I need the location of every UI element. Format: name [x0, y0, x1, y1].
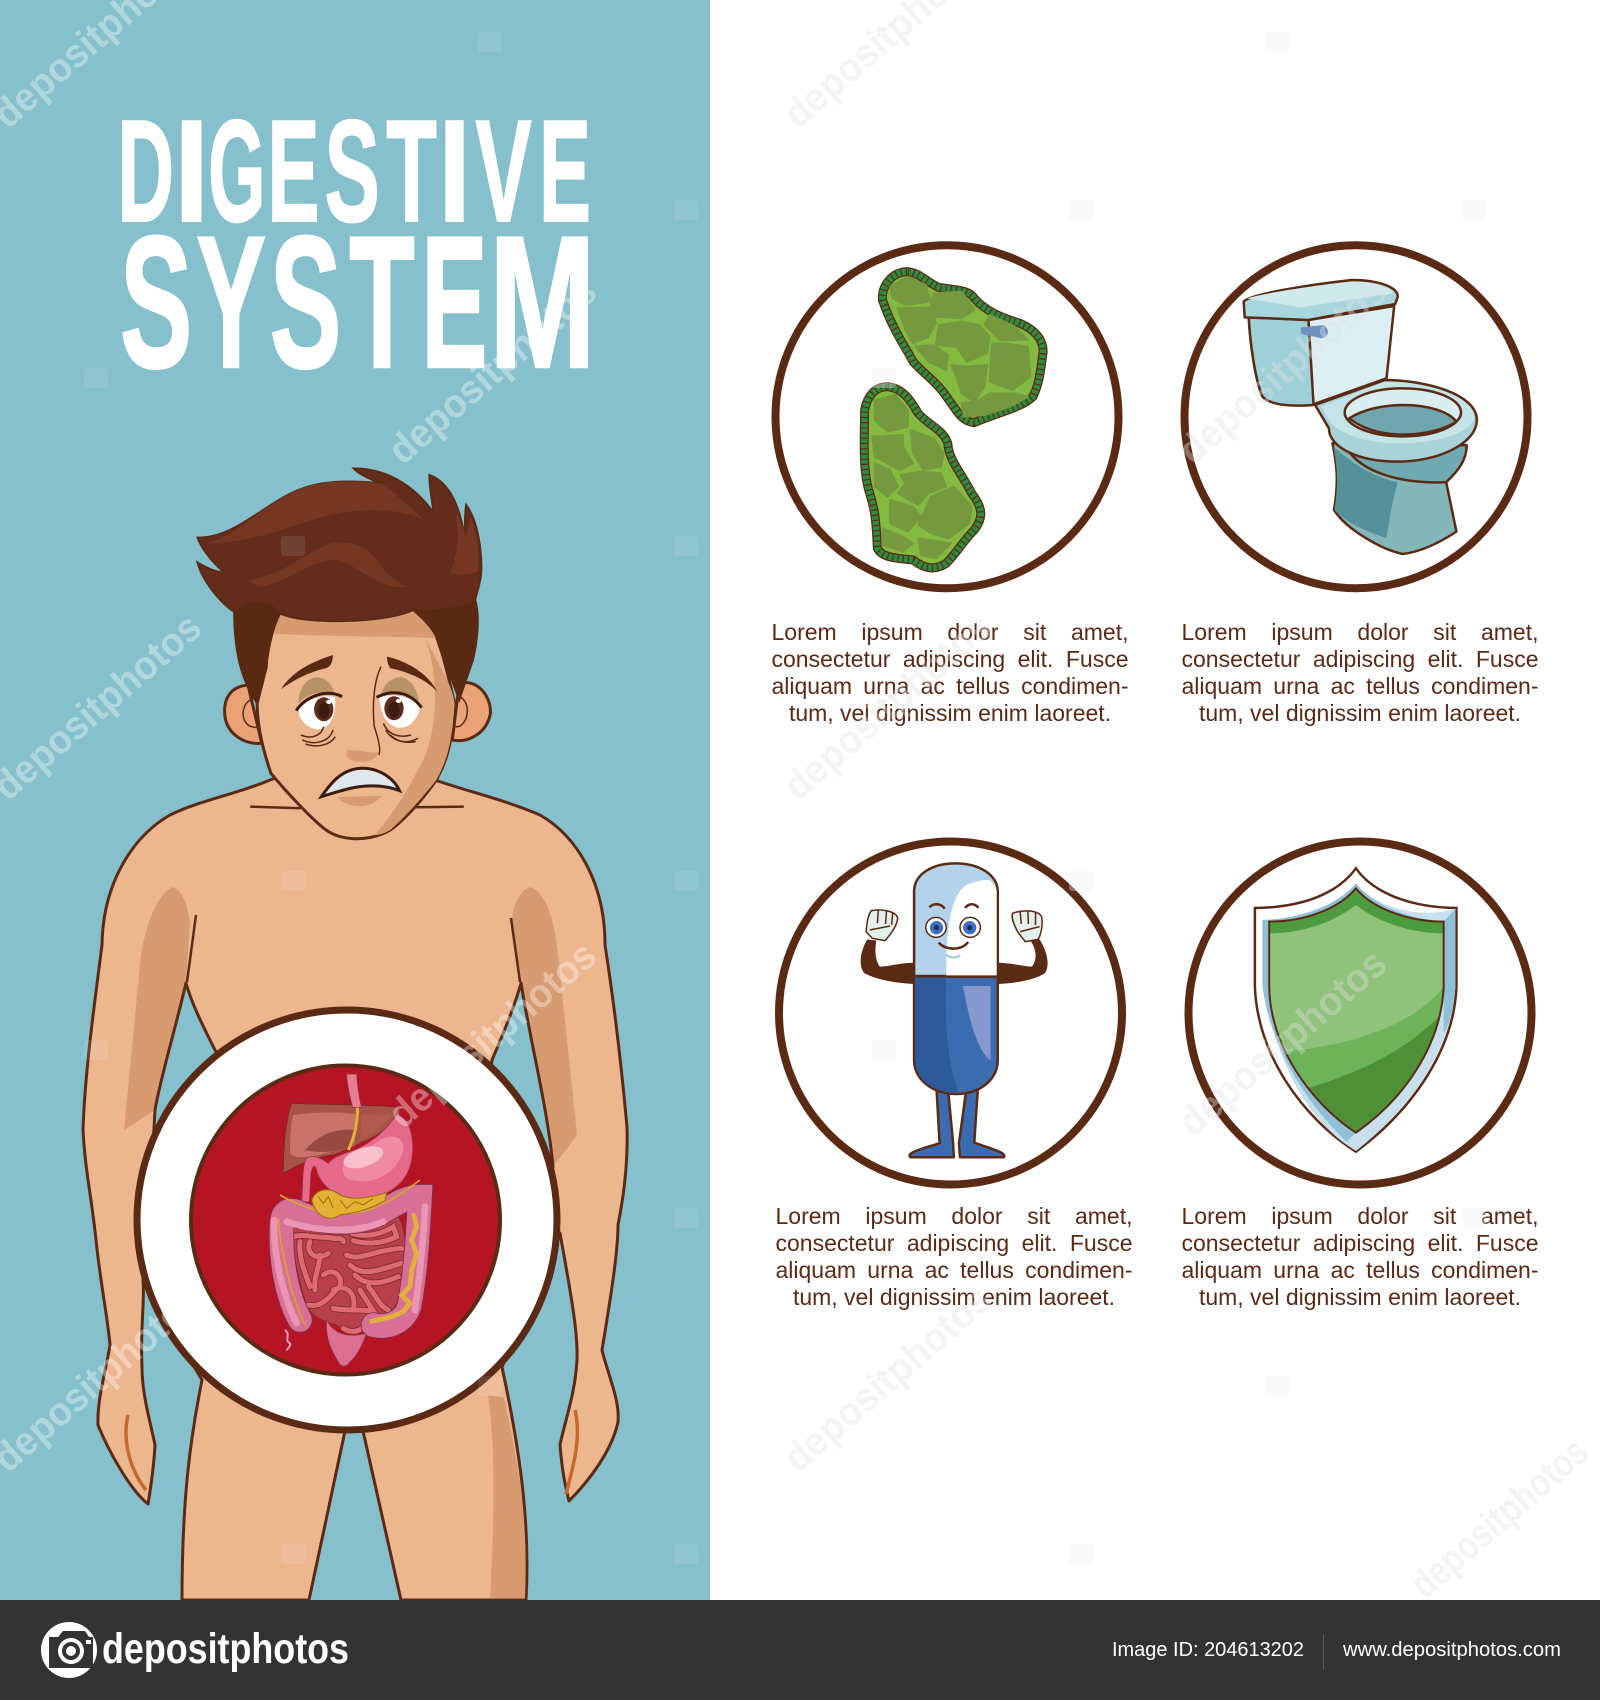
text block: shield: tum, vel dignissim enim laoreet. — [1199, 1284, 1521, 1310]
logo wordmark: depositphotos — [102, 1625, 349, 1673]
heading line: DIGESTIVE: T — [386, 91, 437, 253]
right eye — [377, 693, 422, 728]
eye bags — [298, 677, 419, 703]
bowl rim — [1315, 380, 1477, 482]
text block: toilet — [1182, 619, 1538, 726]
illustration: sick man with digestive organs — [82, 467, 629, 1600]
upper bacterium — [882, 272, 1043, 423]
text block: shield — [1182, 1203, 1538, 1310]
small intestine — [292, 1217, 405, 1331]
website: www.depositphotos.com — [1342, 1639, 1561, 1661]
watermarks: depositphotos — [1170, 269, 1395, 473]
ring — [776, 245, 1118, 588]
text block: toilet: aliquam urna ac tellus condimen- — [1182, 673, 1538, 699]
image id: Image ID: 204613202 — [1112, 1639, 1304, 1661]
text block: bacteria: Lorem ipsum dolor sit amet, — [772, 619, 1128, 645]
mouth — [321, 768, 400, 806]
ring — [1188, 842, 1532, 1184]
text block: bacteria: aliquam urna ac tellus condimen- — [772, 673, 1128, 699]
shield — [1255, 868, 1456, 1152]
tank — [1244, 280, 1398, 406]
capsule lower — [914, 977, 998, 1094]
large intestine — [274, 1180, 425, 1351]
text block: shield: Lorem ipsum dolor sit amet, — [1182, 1203, 1538, 1229]
ring — [1184, 245, 1528, 588]
watermarks: depositphotos — [775, 605, 1000, 809]
icon: strong pill character in circle — [775, 838, 1126, 1188]
rectum — [326, 1320, 367, 1366]
esophagus — [347, 1074, 361, 1107]
pancreas — [312, 1190, 387, 1218]
text block: pill: aliquam urna ac tellus condimen- — [776, 1257, 1132, 1283]
text block: shield: consectetur adipiscing elit. Fusce — [1182, 1230, 1538, 1256]
eyebrows — [281, 655, 437, 692]
heading line: DIGESTIVE: E — [539, 90, 591, 252]
text block: bacteria — [772, 619, 1128, 726]
pill face — [926, 904, 980, 957]
heading line: DIGESTIVE: G — [208, 91, 265, 253]
bacteria — [864, 272, 1043, 568]
icon: toilet in circle — [1180, 241, 1532, 592]
ears — [225, 682, 490, 743]
fists — [866, 910, 1042, 942]
text block: pill — [776, 1203, 1132, 1310]
capsule upper — [914, 863, 998, 976]
watermarks: depositphotos — [380, 269, 605, 473]
watermarks: depositphotos — [380, 933, 605, 1137]
heading line: SYSTEM — [120, 197, 596, 408]
toilet — [1244, 280, 1477, 554]
left eye — [296, 693, 342, 729]
wrinkles and nose line — [301, 667, 418, 755]
text block: bacteria: consectetur adipiscing elit. Fusce — [772, 646, 1128, 672]
heading line: DIGESTIVE: I — [174, 90, 209, 252]
hair — [197, 468, 481, 703]
arms — [861, 939, 1048, 984]
heading line: DIGESTIVE: I — [438, 90, 471, 252]
heading line: DIGESTIVE: V — [476, 91, 532, 253]
text block: pill: consectetur adipiscing elit. Fusce — [776, 1230, 1132, 1256]
icon: green shield in circle — [1184, 838, 1536, 1188]
text block: bacteria: tum, vel dignissim enim laoreet. — [789, 700, 1111, 726]
digestive organs — [274, 1074, 425, 1366]
nose — [346, 750, 379, 762]
ring — [779, 842, 1122, 1184]
stomach — [302, 1115, 413, 1202]
logo icon: camera — [41, 1622, 97, 1678]
liver — [283, 1103, 398, 1173]
lower bacterium — [864, 387, 981, 568]
text block: toilet: tum, vel dignissim enim laoreet. — [1199, 700, 1521, 726]
face shading — [269, 610, 455, 835]
panel: blue background — [0, 0, 710, 1600]
heading line: DIGESTIVE: E — [268, 90, 319, 252]
heading line: DIGESTIVE — [117, 90, 591, 253]
base — [1332, 443, 1467, 554]
abdomen circle — [137, 1010, 557, 1430]
text block: pill: tum, vel dignissim enim laoreet. — [793, 1284, 1115, 1310]
head — [197, 468, 490, 839]
heading line: DIGESTIVE: S — [325, 91, 380, 253]
shield frame — [1255, 868, 1456, 1152]
footer bar — [0, 1600, 1600, 1700]
watermarks: depositphotos — [775, 1277, 1000, 1481]
pill character — [861, 863, 1048, 1157]
text block: toilet: consectetur adipiscing elit. Fusce — [1182, 646, 1538, 672]
text block: toilet: Lorem ipsum dolor sit amet, — [1182, 619, 1538, 645]
face — [257, 610, 455, 839]
icon: bacteria in circle — [772, 241, 1122, 592]
text block: pill: Lorem ipsum dolor sit amet, — [776, 1203, 1132, 1229]
watermarks: depositphotos — [1170, 941, 1395, 1145]
title: Digestive System — [117, 90, 596, 400]
shield green — [1270, 890, 1443, 1132]
body — [83, 778, 627, 1600]
collar lines — [250, 807, 464, 808]
legs — [910, 1080, 1004, 1157]
heading line: DIGESTIVE: D — [117, 90, 174, 252]
text block: shield: aliquam urna ac tellus condimen- — [1182, 1257, 1538, 1283]
